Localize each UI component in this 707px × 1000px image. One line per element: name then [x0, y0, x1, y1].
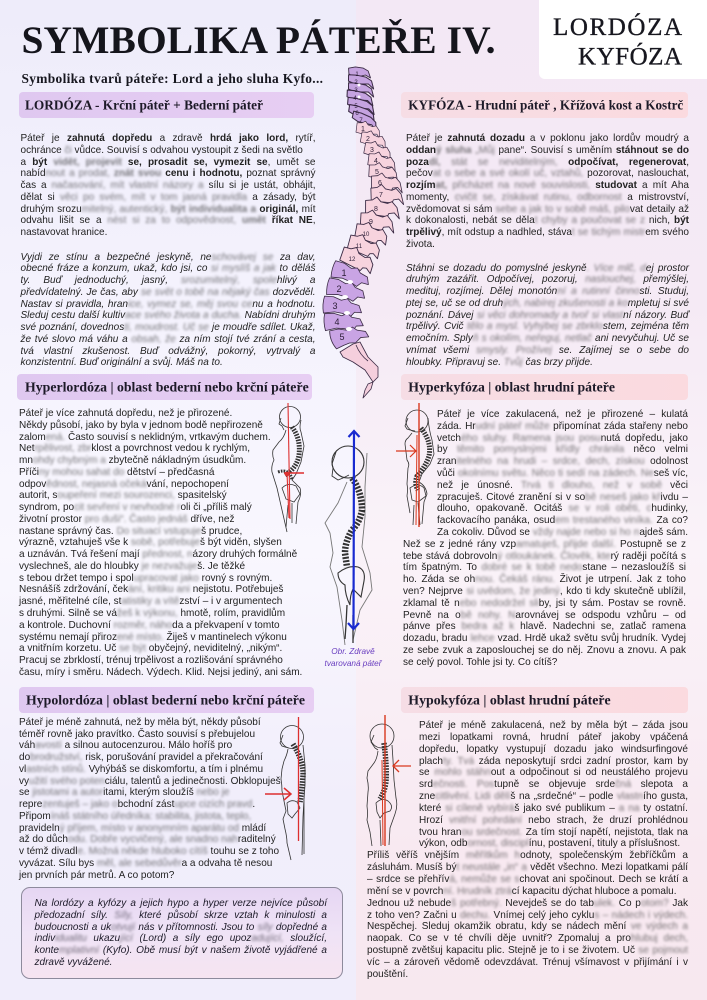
vertebra numbers: 12	[349, 257, 356, 263]
vertebra numbers: 4	[334, 317, 340, 327]
text: lordóza italic advice: své poznání, dovednosti, moudrost. Uč se je moudře sdílet. Ukaž,	[20, 322, 316, 333]
text: lordóza description: nabídnout a prodat, znát svou cenu i hodnotu, poznat správný	[20, 168, 315, 179]
text: hypokyfóza: výkon, odbornost, disciplínu, postavení, tituly a příslušnost.	[419, 838, 680, 849]
text: lordóza italic advice: obecné fráze a konzum, ukaž, kdo jsi, co si myslíš a jak to děláš	[20, 263, 316, 274]
text: hypolordóza: pravidelný příjem, místo v anonymním aparátu od mládí	[19, 823, 266, 834]
text: hypokyfóza: Jednou už nebudeš potřebný. Nevejdeš se do tabulek. Co potom? Jak	[367, 898, 688, 909]
text: hyperkyfóza: se celý povol. Tohle jsi ty. Co cítíš?	[403, 657, 557, 668]
text: hyperkyfóza: ho. Záda se ohnou. Čekáš ránu. Život je utrpení. Jak z toho	[403, 574, 686, 585]
vertebra numbers: 5	[375, 169, 379, 176]
text: hypolordóza: váhavostí a silnou autocenzurou. Málo hoříš pro	[19, 740, 232, 751]
text: hyperkyfóza: tím špatným. To dobré se k tobě nedostane – nezasloužíš si	[403, 562, 686, 573]
text: hyperlordóza: nastane správný čas. Do situací vstupuješ prudce,	[19, 526, 242, 537]
text: hypokyfóza: mezi lopatkami rovná, hrudní páteř jakoby vpáčená	[419, 732, 688, 743]
thoracic vertebrae	[338, 120, 405, 275]
text: hypolordóza: Páteř je méně zahnutá, než by měla být, někdy působí	[19, 717, 261, 728]
vertebra numbers: 2	[336, 284, 342, 294]
text: lordóza italic advice: Sleduj cestu další kultivace svého života a ducha. Nabídni druhým	[20, 310, 316, 321]
heading: kyfóza: KYFÓZA - Hrudní páteř , Křížová kost a Kostrč	[408, 96, 683, 112]
text: hyperkyfóza: Páteř je více zakulacená, než je přirozené – kulatá	[437, 409, 688, 420]
text: hypolordóza: jen prvních pár metrů. A co potom?	[19, 870, 174, 881]
vertebra numbers: 1	[341, 268, 347, 278]
lumbar vertebrae	[322, 260, 372, 350]
text: hyperkyfóza: zranitelného na hrudi – srdce, dech, získou odolnost	[437, 456, 688, 467]
vertebra numbers: 7	[359, 118, 363, 124]
heading: lordóza: LORDÓZA - Krční páteř + Bederní páteř	[25, 96, 263, 112]
text: hypolordóza: až do důchodu. Dobře vycvičený, ale snadno nahraditelný	[19, 834, 276, 845]
icon: hypokyphosis figure	[367, 724, 397, 846]
text: kyfóza italic advice: Stáhni se dozadu do pomyslné jeskyně. Více mlč, dej prostor	[406, 262, 689, 274]
callout: summary: zdravě vyvážené.	[34, 957, 112, 968]
vertebra numbers: 2	[366, 136, 370, 143]
text: hyperlordóza: a uznáván. Tvá řešení mají přednost, názory druhých formálně	[19, 549, 297, 560]
text: lordóza italic advice: Vyjdi ze stínu a bezpečné jeskyně, neschovávej se za dav,	[20, 252, 315, 262]
text: lordóza description: ochránce či vůdce. Souvisí s odvahou vystoupit z šedi na světlo	[20, 145, 303, 156]
text: hyperkyfóza: by těmito pomyslnými křídly chránila něco velmi	[437, 444, 688, 455]
text: hyperkyfóza: Než se z jedné rány vzpamatuješ, přijde další. Postupně se z	[403, 539, 686, 550]
vertebra numbers: 1	[361, 126, 365, 133]
text: hyperkyfóza: tebe stává dobrovolný otloukánek. Člověk, který raději počítá s	[403, 551, 686, 562]
vertebra numbers: 3	[332, 301, 338, 311]
text: kyfóza italic advice: vnímat všemi smysly. Prožívej se. Zajímej se o sebe do	[406, 345, 689, 356]
text: hyperkyfóza: záda. Hrudní páteř může připomínat záda stařeny nebo	[437, 421, 688, 432]
caption: healthy spine: tvarovaná páteř	[325, 658, 381, 668]
heading: hyperlordóza	[17, 374, 312, 400]
vertebra numbers: 9	[369, 219, 373, 226]
text: hypolordóza: vyvázat. Sílu bys měl, ale sebedůvěra a odvaha tě nesou	[19, 858, 272, 869]
text: hypokyfóza: tvou hranou srdečnost. Za tím stojí napětí, nejistota, tlak na	[419, 827, 688, 838]
text: lordóza italic advice: předvídatelný. Je čas, aby se svět o tobě na nějaký čas dozvěděl.	[20, 287, 316, 298]
text: hyperlordóza: zalomená. Často souvisí s neklidným, vrtkavým duchem.	[19, 432, 271, 443]
text: hypokyfóza: zásluhám. Musíš být neustále „in“ a vědět všechno. Mezi lopatkami pálí	[367, 862, 688, 873]
text: hypolordóza: vlastních stínů. Vyhýbáš se diskomfortu, a tím i plnému	[19, 764, 263, 775]
vertebra numbers: 6	[378, 180, 382, 187]
text: hyperlordóza: Nesnášíš zdržování, čekání, kritiku ani nejistotu. Potřebuješ	[19, 584, 283, 595]
heading: hyperkyfóza: Hyperkyfóza | oblast hrudní páteře	[408, 380, 615, 394]
text: kyfóza description: zvědomovat si sám sebe a jak to v sobě máš, pilovat detaily až	[406, 204, 689, 215]
text: hyperkyfóza	[403, 409, 688, 668]
text: lordóza description: dělat si věci po svém, mít v tom jasná pravidla a zásady, být	[20, 192, 316, 203]
text: hypokyfóza: které si cíleně vybíráš jako své publikum – a na ty ostatní.	[419, 803, 688, 814]
callout: summary: budoucnosti a ukotvují nás v přítomnosti. Jsou to síly dopředné a	[34, 922, 327, 933]
text: hyperlordóza: a kontrole. Duchovní rozměr, náhoda a překvapení v tomto	[19, 620, 280, 631]
text: kyfóza italic advice	[406, 262, 690, 368]
text: hypokyfóza: mění se v povrchní. Hrudník ztrácí kapacitu dýchat hluboce a pomalu.	[367, 886, 677, 897]
white box: topic labels: LORDÓZA	[553, 13, 682, 41]
text: lordóza italic advice: že tvé slovo má váhu a obsah, že za ním stojí tvé zrání a cesta,	[20, 334, 316, 345]
text: hyperlordóza: Někdy působí, jako by byla v jednom bodě nepřirozeně	[19, 420, 263, 431]
text: hyperlordóza: vyslechneš, ale do hloubky je nezvažuješ. Je těžké	[19, 561, 245, 572]
text: hyperlordóza	[18, 408, 302, 678]
text: hyperlordóza: systému nemají přirozené místo. Žiješ v mantinelech výkonu	[19, 632, 287, 643]
text: hyperkyfóza: než je únosné. Trvá ti dlouho, než v sobě věci	[437, 480, 688, 491]
icon: hyperkyphosis figure	[405, 410, 434, 525]
text: lordóza description	[20, 133, 316, 238]
text: hypolordóza: Připomínáš státního úředníka: stabilita, jistota, teplo,	[19, 811, 251, 822]
text: hypokyfóza: z toho ven? Začni u dechu. Vnímej celý jeho cyklus – nádech i výdech.	[367, 910, 688, 920]
text: hyperkyfóza: pánve přes bedra až k hlavě. Nadechni se, zatlač ramena	[403, 621, 686, 632]
white joint gaps	[342, 84, 360, 331]
vertebra numbers: 2	[354, 80, 358, 86]
vertebra numbers: 11	[356, 244, 363, 250]
text: hyperlordóza: výrazně, vztahuješ vše k sobě, potřebuješ být viděn, slyšen	[19, 537, 282, 548]
vertebra numbers: 5	[354, 104, 358, 110]
text: lordóza description: a být vidět, projevit se, prosadit se, vymezit se, umět se	[20, 157, 315, 168]
text: kyfóza italic advice: hloubky. Připravuj se. Tvůj čas brzy přijde.	[406, 357, 593, 368]
text: hyperkyfóza: Pevně na obě nohy. Narovnávej se odspodu vzhůru – od	[403, 610, 686, 621]
vertebra numbers: 1	[355, 72, 359, 78]
text: hyperkyfóza: ven? Nejprve si uvědom, že jediný, kdo ti kdy skutečně ublížil,	[403, 586, 686, 597]
text: hyperkyfóza: dozadu, bradu lehce vzad. Hrdě ukaž světu svůj hrudník. Vydej	[403, 633, 686, 644]
text: hyperkyfóza: dlouho, opakovaně. Ocitáš se v roli oběti, chudinky,	[437, 503, 688, 514]
vertebra numbers: 4	[374, 158, 378, 165]
vertebra numbers: 10	[363, 232, 370, 238]
heading: hypolordóza: Hypolordóza | oblast bederní nebo krční páteře	[26, 692, 305, 708]
text: hyperlordóza: Páteř je více zahnutá dopředu, než je přirozené.	[19, 408, 232, 419]
vertebra numbers: 6	[355, 111, 359, 117]
text: hyperlordóza: syndrom, pocit sevření v nevhodné roli či „příliš malý	[19, 502, 252, 513]
text: hypokyfóza: naopak. Co se v té chvíli děje uvnitř? Zpomaluj a prohlubuj dech,	[367, 933, 688, 944]
text: hyperkyfóza: Za cokoliv. Důvod se vždy najde nebo si ho najdeš sám.	[437, 527, 688, 538]
text: hypokyfóza: plachty. Tvá záda neposkytují srdci zadní prostor, kam by	[419, 756, 688, 767]
text: kyfóza description: trpělivý, mít odstup a nadhled, stávat se tichým mistrem svého	[406, 227, 689, 238]
text: lordóza description: druhým srozumitelný, autentický, být individualita a originál, mít	[20, 204, 316, 215]
heading: kyfóza	[401, 92, 688, 118]
text: hypokyfóza: Hrozí vnitřní pohrdání nebo strach, že druzí prohlédnou	[419, 815, 688, 826]
text: kyfóza italic advice: poznání. Dávej si věci dohromady a tvoř si vlastní názory. Buď	[406, 310, 689, 321]
text: hyperlordóza: s druhými. Silně se vážeš k výkonu, hmotě, rolím, pravidlům	[19, 608, 285, 619]
callout: summary: kontemplativní (Kyfo). Obě musí být v našem životě vyjádřené a	[34, 945, 327, 956]
text: hypokyfóza: pouštění.	[367, 969, 408, 980]
text: hypokyfóza: víc – a zároveň vědomě odevzdávat. Trénuj všímavost v přijímání i v	[367, 957, 688, 968]
text: hypolordóza: reprezentuješ – jako obchodní zástupce cizích pravd.	[19, 799, 255, 810]
text: kyfóza italic advice: emočním. Splyň s okolím, neřeguj, netlač ani nevyčuhuj. Uč se	[406, 333, 689, 344]
vertebra numbers: 3	[354, 88, 358, 94]
text: hyperlordóza: odpovědnost, nejasná očekávání, nepochopení	[19, 479, 229, 490]
text: hyperlordóza: Pracuj se zbrklostí, trénuj trpělivost a rozlišování správného	[19, 655, 283, 666]
text: hypolordóza: využití svého potenciálu, talentů a jedinečnosti. Obklopuješ	[19, 776, 281, 787]
text: hypokyfóza: Nespěchej. Sleduj okamžik obratu, kdy se nádech mění ve výdech a	[367, 921, 688, 932]
vertebra numbers: 7	[379, 192, 383, 199]
vertebra numbers: 8	[374, 206, 378, 213]
text: hyperkyfóza: zpracuješ. Citové zranění si v sobě neseš jako křivdu –	[437, 492, 688, 503]
callout: summary	[20, 887, 342, 979]
callout: summary: předozadní síly. Síly, které působí skrze vztah k minulosti a	[34, 910, 327, 921]
icon: central figure with blue axis	[325, 446, 372, 645]
text: hyperkyfóza: zklamal tě nebo nedodržel sliby, jsi ty sám. Postav se rovně.	[403, 598, 686, 609]
text: hypokyfóza: postupně zvětšuj kapacitu plic. Stejně je to i se životem. Uč se pojmout	[367, 945, 688, 956]
text: hyperkyfóza: fackovacího panáka, osudem trestaného viníka. Za co?	[437, 515, 688, 526]
white box: topic labels	[539, 0, 707, 79]
heading: hypolordóza	[19, 687, 314, 713]
text: kyfóza italic advice: ptej se, uč se od druhých, nabírej zkušenosti a kompletuj si své	[406, 298, 689, 309]
text: hyperkyfóza: vůči okolnímu světu. Něco ti sedí na zádech. Neseš víc,	[437, 468, 688, 479]
heading: hypokyfóza: Hypokyfóza | oblast hrudní páteře	[408, 692, 611, 708]
text: hyperkyfóza: vetchého sluhy. Ramena jsou posunutá dopředu, jako	[437, 433, 688, 444]
text: hypokyfóza: znecitlivění. Lidi dělíš na „srdečné“ – podle vlastního gusta,	[419, 791, 688, 802]
text: hypokyfóza: – srdce se přehřívá, nemůže se schovat ani spočinout. Dech se krátí a	[367, 874, 688, 885]
icon: hyperlordosis figure	[272, 406, 304, 532]
text: hypolordóza: se jistotami a autoritami, kterým sloužíš nebo je	[19, 787, 229, 798]
white box: topic labels: KYFÓZA	[578, 42, 682, 70]
text: hypokyfóza: dopředu, lopatky vystupují dozadu jako windsurfingové	[419, 744, 688, 755]
text: kyfóza description: života.	[406, 239, 435, 250]
text: lordóza italic advice: tvá vlastní zkušenost. Buď odvážný, pokorný, vytrvalý a	[20, 346, 316, 357]
text: kyfóza description	[406, 132, 689, 250]
text: lordóza description: nastavovat hranice.	[20, 227, 107, 238]
callout: summary: Na lordózy a kyfózy a jejich hypo a hyper verze nejvíce působí	[34, 898, 327, 909]
text: kyfóza description: pečovat o sebe a své okolí uč, vztahů, pozorovat, naslouchat,	[406, 168, 689, 179]
text: hyperlordóza: s tebou držet tempo i spolupracovat jako rovný s rovným.	[19, 573, 272, 584]
text: hyperlordóza: Příčiny mohou sahat do dětství – předčasná	[19, 467, 214, 478]
heading: hyperlordóza: Hyperlordóza | oblast bederní nebo krční páteře	[25, 380, 309, 394]
heading: hyperkyfóza	[401, 374, 688, 400]
text: kyfóza description: Páteř je zahnutá dozadu a v poklonu jako lordův moudrý a	[406, 133, 689, 144]
text: hyperkyfóza: ze sebe zvuk a zaposlouchej se do něj. Znovu a znovu. A pak	[403, 645, 686, 656]
text: lordóza description: Páteř je zahnutá dopředu a zdravě hrdá jako lord, rytíř,	[20, 133, 316, 144]
text: hyperlordóza: autorit, soupeření mezi sourozenci, spasitelský	[19, 490, 227, 501]
sacrum and coccyx	[340, 342, 378, 382]
heading: lordóza	[19, 92, 314, 118]
text: lordóza italic advice	[20, 252, 316, 368]
text: lordóza description: čas a načasování, mít vlastní názory a sílu si je ustát, obhájit,	[20, 180, 316, 191]
caption: healthy spine	[324, 647, 382, 668]
text: kyfóza description: pozadí, stát se neviditelným, odpočívat, regenerovat,	[406, 157, 689, 168]
text: kyfóza italic advice: medituj, rozjímej. Dělej monotónní a rutinní činnosti. Studuj,	[406, 286, 689, 297]
text: kyfóza description: oddaný sluha „Můj pane“. Souvisí s uměním stáhnout se do	[406, 145, 689, 156]
subtitle: Symbolika tvarů páteře: Lord a jeho sluha Kyfo...	[22, 71, 323, 86]
text: hyperlordóza: Netrpělivost, zbrklost a povrchnost vedou k rychlým,	[19, 443, 250, 454]
icon: hypolordosis figure	[280, 726, 305, 860]
text: hypokyfóza	[367, 720, 689, 980]
vertebra numbers: 4	[353, 96, 357, 102]
text: lordóza description: odvahu lišit se a nést si za to odpovědnost, umět říkat NE,	[20, 215, 316, 226]
text: kyfóza description: k dokonalosti, nebát se dělat chyby a poučovat se z nich, být	[406, 215, 689, 226]
vertebra numbers	[332, 72, 383, 342]
text: hypokyfóza: srdečnosti. Postupně se objevuje srdečná slepota a	[419, 779, 688, 790]
text: hypolordóza: v témž divadle. Možná někde hluboko cítíš touhu se z toho	[19, 846, 279, 857]
text: hyperlordóza: životní prostor pro duši“. Často jednáš dříve, než	[19, 514, 234, 525]
text: hyperlordóza: mnohdy chybným a zbytečně nákladným úsudkům.	[19, 455, 246, 466]
text: hypolordóza: téměř rovně jako pravítko. Často souvisí s přebujelou	[19, 729, 255, 740]
text: lordóza italic advice: ty. Buď jednoduchý, jasný, srozumitelný, spolehlivý a	[20, 275, 316, 286]
text: hypokyfóza: se mohlo stáhnout a odpočinout si od neustálého projevu	[419, 767, 688, 778]
cervical vertebrae	[345, 66, 380, 131]
text: kyfóza description: momenty, cvičit se, získávat rutinu, odbornost a mistrovství,	[406, 192, 689, 203]
text: lordóza italic advice: Nastav si pravidla, hranice, vymez se, měj svou cenu a hodnotu.	[20, 299, 316, 310]
text: hyperlordóza: jasné, měřitelné cíle, statistiky a vítězství – i v argumentech	[19, 596, 282, 607]
text: hypolordóza: dobrodružství, risk, porušování pravidel a překračování	[19, 752, 263, 763]
text: hypokyfóza: Příliš věříš vnějším měřítkům hodnoty, společenským žebříčkům a	[367, 850, 688, 861]
text: hypokyfóza: Páteř je méně zakulacená, než by měla být – záda jsou	[419, 720, 688, 731]
text: hyperlordóza: a vnitřním korzetu. Uč se být obyčejný, neviditelný, „nikým“.	[19, 643, 282, 654]
text: lordóza italic advice: konzistentní. Buď originální a svůj. Máš na to.	[20, 357, 223, 368]
caption: healthy spine: Obr. Zdravě	[331, 647, 375, 656]
text: kyfóza italic advice: druhým zazářit. Odpočívej, pozoruj, naslouchej, přemýšlej,	[406, 274, 689, 285]
callout: summary: individualitu ukazující (Lord) a síly ego upozadující, sloužící,	[34, 933, 327, 944]
text: hyperlordóza: času, míry i směru. Nádech. Výdech. Klid. Nejsi jediný, ani sám.	[19, 667, 302, 678]
title: SYMBOLIKA PÁTEŘE IV.	[22, 18, 496, 62]
text: kyfóza italic advice: trpělivý. Cvič tělo a mysl. Vyhýbej se zbrklostem, zejména těm	[406, 321, 689, 332]
text: kyfóza description: rozjímat, přicházet na nové souvislosti, studovat a mít Aha	[406, 180, 689, 191]
heading: hypokyfóza	[401, 687, 688, 713]
text: hypolordóza	[18, 716, 281, 881]
vertebra numbers: 3	[370, 147, 374, 154]
vertebra numbers: 5	[339, 332, 345, 342]
